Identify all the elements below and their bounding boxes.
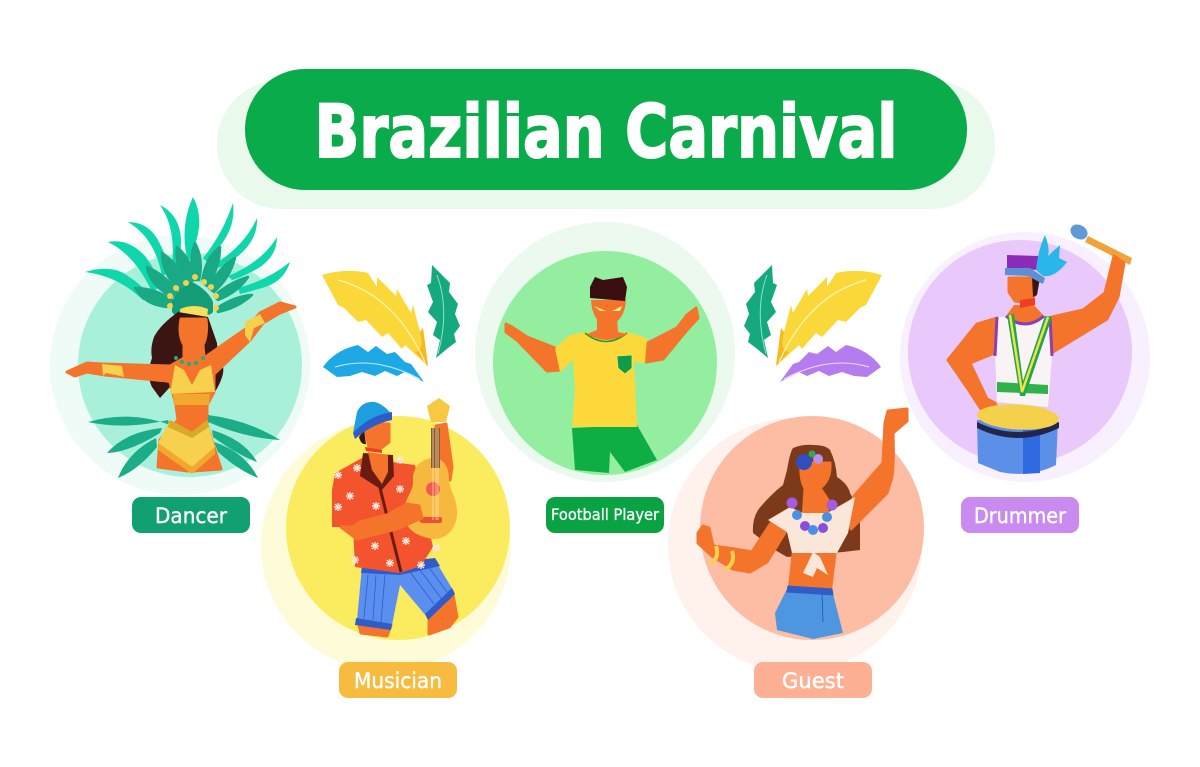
bikini top [170,365,215,394]
panel: dancer [50,197,310,533]
hair [753,445,860,557]
guest label: Guest [782,669,844,693]
musician label [339,662,457,698]
musician label: Musician [354,669,442,693]
top [768,497,855,553]
dancer label [132,497,250,533]
feather skirt [88,415,280,478]
shirt [555,332,647,427]
icon: crown [167,274,219,318]
panel: football player [475,222,735,533]
lei [786,498,838,535]
dancer body [67,303,295,471]
hair flowers [796,450,823,470]
collar and placket [360,453,394,490]
panel: drummer [900,221,1150,533]
forearm [341,504,422,539]
ukulele [404,398,457,539]
stars [334,456,440,569]
shirt [332,458,433,573]
badge [617,355,632,374]
panel: guest [668,409,924,698]
drum [976,402,1060,474]
bracelets [710,546,733,570]
dancer label: Dancer [155,504,227,528]
title text: Brazilian Carnival [314,90,898,175]
neck and head [587,318,627,340]
guest raised arm [849,409,907,529]
tank top [995,317,1052,407]
left arm [698,523,786,572]
torso and face [801,463,830,520]
player arms [506,324,560,371]
raised arm [1048,256,1124,352]
legs [359,595,457,636]
feathers: left group [322,265,460,382]
drummer label: Drummer [974,504,1066,528]
football player label: Football Player [551,505,659,524]
shorts [572,425,657,473]
neck [1006,305,1044,323]
title banner [217,69,995,209]
drummer label [961,497,1079,533]
hair [149,312,223,398]
drumstick [1085,236,1132,265]
hat and head [364,424,389,449]
panel: musician [261,398,511,698]
arm bands [102,364,124,377]
shorts [357,560,453,625]
left arm [948,318,999,412]
hat feathers [1036,235,1067,276]
jeans [775,587,843,639]
football player label [546,497,664,533]
feathers: right group [744,265,882,382]
guest label [754,662,872,698]
icon: feather headdress [85,197,290,300]
bikini skirt [158,420,215,467]
head and hat [1009,278,1036,303]
sash [997,382,1048,394]
